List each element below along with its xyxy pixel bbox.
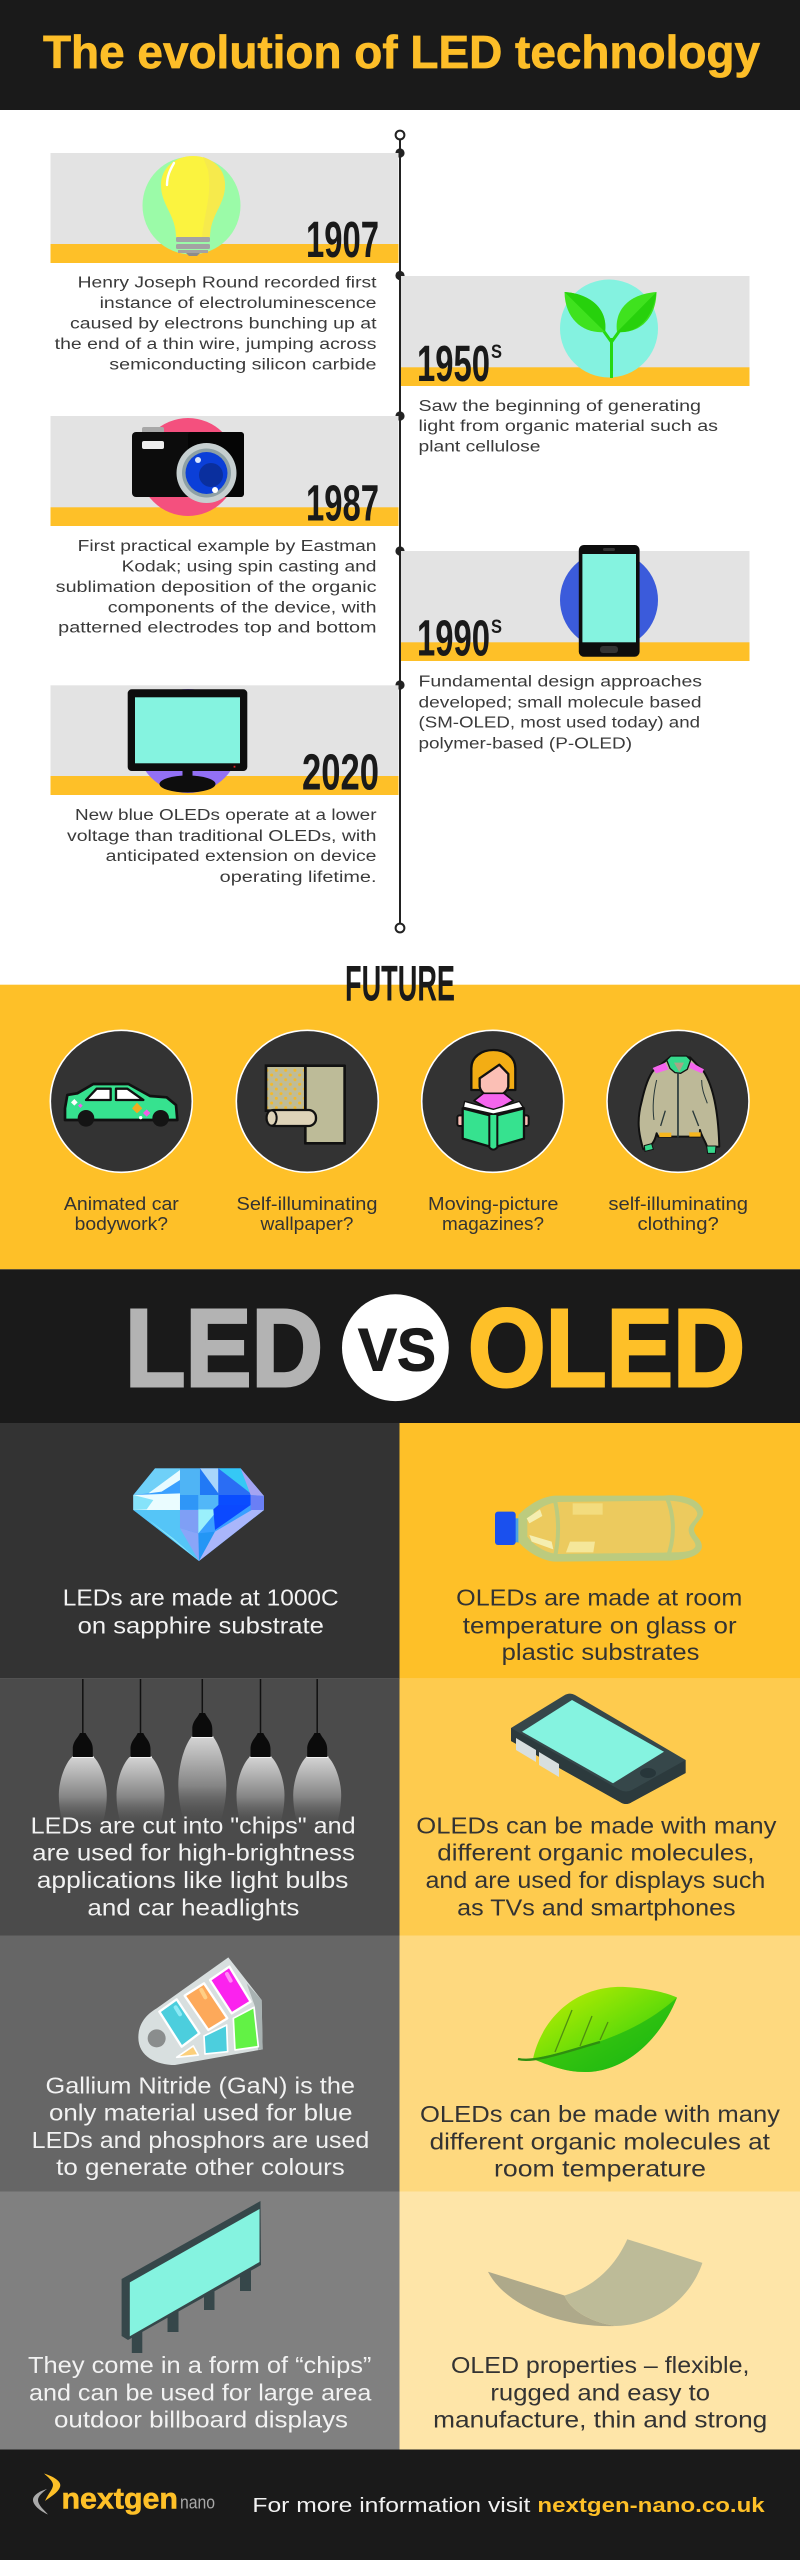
timeline panel: 1990s <box>401 545 750 752</box>
label: clothing: clothing? <box>638 1213 719 1234</box>
icon: flexible sheet <box>488 2239 702 2326</box>
text: gallium nitride: Gallium Nitride (GaN) is the <box>46 2072 355 2098</box>
icon: colour swatch <box>138 1957 263 2065</box>
label: magazines <box>428 1193 558 1234</box>
description: 1987 <box>56 538 377 637</box>
text: flexible: OLED properties – flexible, <box>451 2352 749 2378</box>
description: 1907 <box>55 274 377 374</box>
call to action text: For more information visit <box>252 2494 531 2517</box>
text: billboards: They come in a form of “chips” <box>28 2352 371 2378</box>
call to action text: nextgen-nano.co.uk <box>537 2494 765 2517</box>
text: displays <box>416 1812 777 1920</box>
year: 1950s: 1950 <box>417 335 490 392</box>
description: 1907: Henry Joseph Round recorded first <box>78 274 377 292</box>
year: 1987: 1987 <box>306 474 379 532</box>
icon: car <box>50 1030 192 1172</box>
description: 1907: semiconducting silicon carbide <box>109 356 377 374</box>
label: magazines: magazines? <box>442 1213 544 1234</box>
description: 1907: instance of electroluminescence <box>100 295 376 312</box>
description: 2020: operating lifetime. <box>220 869 376 886</box>
icon: light bulb <box>142 156 240 256</box>
heading: future: FUTURE <box>345 956 455 1012</box>
comparison row 1 left: sapphire <box>0 1423 400 1679</box>
title: The evolution of LED technology <box>43 26 760 78</box>
icon: monitor <box>128 689 247 793</box>
text: gallium nitride: LEDs and phosphors are used <box>32 2127 369 2153</box>
label: clothing: self-illuminating <box>608 1193 748 1214</box>
text: displays: and are used for displays such <box>426 1867 765 1893</box>
text: organic molecules: OLEDs can be made with many <box>420 2101 781 2127</box>
label: car <box>64 1193 179 1234</box>
icon: reader with magazine <box>422 1030 564 1172</box>
text: displays: different organic molecules, <box>437 1840 754 1866</box>
text: sapphire: LEDs are made at 1000C <box>63 1585 339 1611</box>
label: wallpaper <box>236 1193 378 1234</box>
comparison row 3 right: organic molecules <box>400 1936 800 2192</box>
comparison row 4 right: flexible <box>400 2192 800 2450</box>
text: organic molecules: room temperature <box>494 2156 706 2182</box>
text: organic molecules <box>420 2101 781 2182</box>
panel: future <box>0 956 800 1269</box>
text: flexible: rugged and easy to <box>490 2379 710 2405</box>
text: plastic: temperature on glass or <box>463 1612 737 1638</box>
text: flexible: manufacture, thin and strong <box>433 2406 767 2432</box>
description: 1950s: Saw the beginning of generating <box>418 398 701 415</box>
timeline panel: 2020 <box>50 685 398 886</box>
text: sapphire: on sapphire substrate <box>78 1612 324 1638</box>
timeline panel: 1987 <box>50 416 398 637</box>
description: 1987: Kodak; using spin casting and <box>122 559 376 576</box>
description: 1990s: developed; small molecule based <box>418 694 702 711</box>
year: 1950s: S <box>491 342 502 363</box>
label: wallpaper: wallpaper? <box>259 1213 354 1234</box>
text: billboards: outdoor billboard displays <box>54 2406 348 2432</box>
label: clothing <box>608 1193 748 1234</box>
text: chips: and car headlights <box>87 1894 299 1920</box>
icon: plant <box>560 280 658 378</box>
icon: leaf <box>518 1987 677 2072</box>
logo: nextgen nano: nano <box>180 2492 215 2512</box>
description: 1990s <box>418 674 702 752</box>
timeline panel: 1907 <box>50 153 398 374</box>
header band <box>0 0 800 110</box>
label: car: bodywork? <box>75 1213 168 1234</box>
heading: LED: LED <box>125 1287 323 1410</box>
call to action text <box>252 2494 765 2517</box>
timeline axis <box>395 131 405 932</box>
text: displays: OLEDs can be made with many <box>416 1812 777 1838</box>
icon: jacket <box>607 1030 749 1172</box>
comparison row 1 right: plastic <box>400 1423 800 1679</box>
description: 2020: anticipated extension on device <box>106 848 376 865</box>
text: organic molecules: different organic molecules at <box>430 2128 771 2154</box>
description: 2020 <box>67 807 376 886</box>
badge: vs: VS <box>358 1316 436 1384</box>
description: 1987: patterned electrodes top and bottom <box>58 620 376 637</box>
description: 1987: components of the device, with <box>108 600 377 617</box>
logo: nextgen nano <box>33 2474 215 2515</box>
text: displays: as TVs and smartphones <box>457 1894 736 1920</box>
text: billboards <box>28 2352 372 2432</box>
description: 1990s: Fundamental design approaches <box>418 674 702 691</box>
text: plastic: plastic substrates <box>502 1639 699 1665</box>
description: 1907: caused by electrons bunching up at <box>70 316 377 332</box>
description: 1907: the end of a thin wire, jumping across <box>55 336 377 353</box>
badge: vs <box>342 1294 449 1401</box>
description: 1990s: polymer-based (P-OLED) <box>418 735 632 752</box>
year: 1990s: S <box>491 617 502 638</box>
timeline panel: 1950s <box>401 276 750 456</box>
icon: wallpaper <box>236 1030 378 1172</box>
icon: plastic bottle <box>495 1495 703 1562</box>
text: flexible <box>433 2352 767 2432</box>
comparison row 4 left: billboards <box>0 2192 400 2450</box>
description: 2020: New blue OLEDs operate at a lower <box>75 807 376 824</box>
description: 1987: sublimation deposition of the organic <box>56 579 377 596</box>
text: plastic <box>456 1585 742 1665</box>
description: 1987: First practical example by Eastman <box>78 538 376 555</box>
comparison row 2 left: chips <box>0 1679 400 1936</box>
comparison row 2 right: displays <box>400 1679 800 1936</box>
text: gallium nitride <box>32 2072 369 2180</box>
description: 1950s <box>418 398 718 456</box>
text: gallium nitride: only material used for blue <box>49 2099 352 2125</box>
label: car: Animated car <box>64 1193 179 1214</box>
text: chips <box>31 1812 356 1920</box>
text: chips: LEDs are cut into "chips" and <box>31 1812 356 1838</box>
text: sapphire <box>63 1585 339 1638</box>
text: billboards: and can be used for large area <box>29 2379 372 2405</box>
panel: LED vs OLED heading <box>0 1269 800 1423</box>
text: chips: applications like light bulbs <box>37 1867 348 1893</box>
footer <box>0 2450 800 2560</box>
description: 1950s: light from organic material such as <box>418 418 718 435</box>
logo: nextgen nano: nextgen <box>62 2482 178 2515</box>
icon: billboard <box>122 2201 261 2353</box>
label: magazines: Moving-picture <box>428 1193 558 1214</box>
year: 1990s: 1990 <box>417 610 490 667</box>
comparison row 3 left: gallium nitride <box>0 1936 400 2192</box>
icon: hanging lights <box>59 1679 341 1830</box>
year: 1907: 1907 <box>306 211 379 268</box>
icon: diamond <box>133 1468 264 1561</box>
heading: OLED: OLED <box>468 1287 745 1410</box>
description: 2020: voltage than traditional OLEDs, with <box>67 828 376 845</box>
icon: camera <box>132 418 244 516</box>
description: 1990s: (SM-OLED, most used today) and <box>418 714 700 731</box>
icon: smartphone <box>560 545 658 657</box>
label: wallpaper: Self-illuminating <box>236 1193 378 1214</box>
text: plastic: OLEDs are made at room <box>456 1585 742 1611</box>
text: gallium nitride: to generate other colours <box>56 2154 345 2180</box>
text: chips: are used for high-brightness <box>32 1840 355 1866</box>
year: 2020: 2020 <box>302 744 379 800</box>
description: 1950s: plant cellulose <box>418 439 540 456</box>
icon: tilted smartphone <box>511 1694 686 1804</box>
